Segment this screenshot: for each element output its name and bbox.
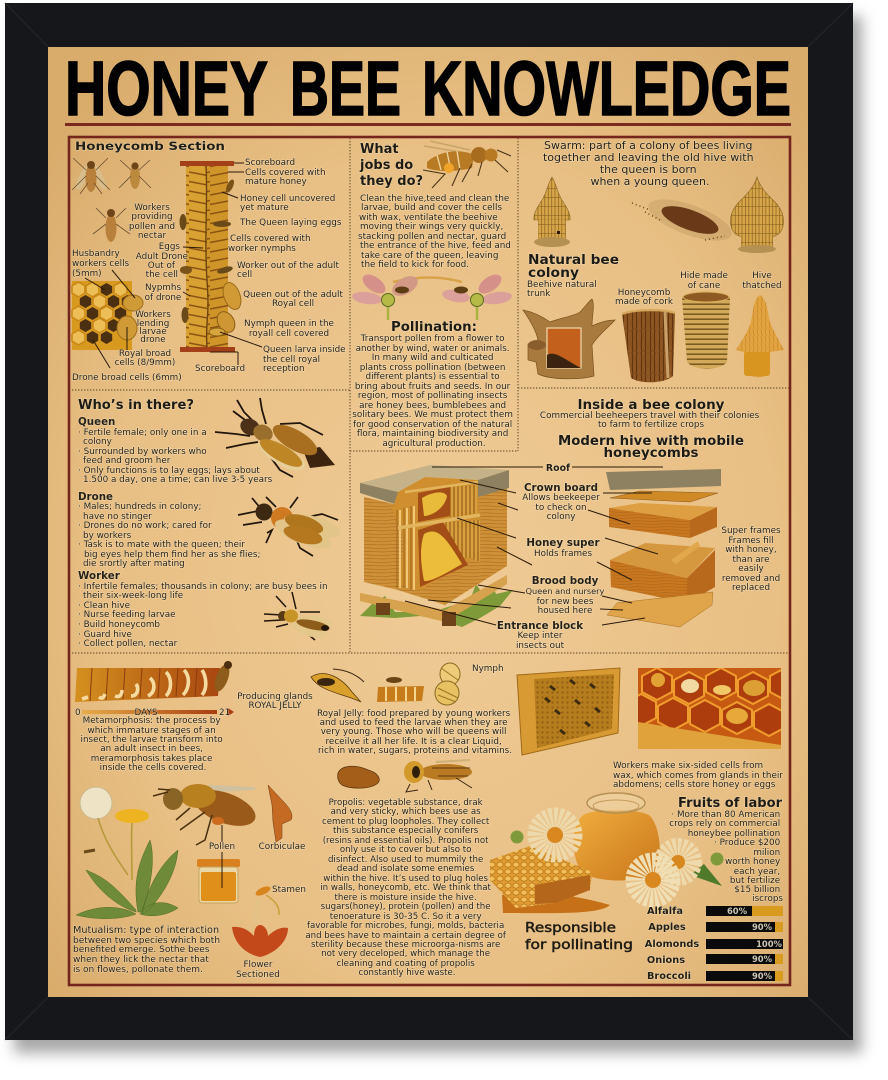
hive part labels: [497, 463, 781, 651]
illustration: worker bee: [264, 592, 334, 641]
illustration: large skep hive: [730, 177, 784, 253]
bar: almonds: Alomonds: [645, 939, 699, 950]
block: queen: feed and groom her: [83, 456, 171, 466]
panel: honeycomb section: [72, 139, 346, 383]
illustration: small skep hive: [534, 177, 570, 247]
text: pollination: flora, maintaining biodiversity and: [357, 429, 508, 439]
text: metamorphosis: Metamorphosis: the process by: [83, 716, 221, 726]
text: jobs: with wax, ventilate the beehive: [359, 213, 498, 223]
section labels: the cell: [146, 270, 178, 280]
text: fruits of labor: crops rely on commercial: [669, 819, 780, 829]
illustration: flying bee: [423, 141, 511, 188]
block: queen: colony: [83, 437, 112, 447]
text: pollination: for good conservation of the natural: [353, 420, 512, 430]
illustration: brood cells: [75, 661, 232, 702]
panel: six-sided cells: [517, 668, 800, 790]
block: queen: · Surrounded by workers who: [78, 447, 207, 457]
block: queen: · Only functions is to lay eggs; lays about: [78, 466, 260, 476]
hive part labels: Honey super: [526, 537, 601, 549]
section labels: Adult Drone: [136, 252, 188, 262]
text: pollination: are honey bees, bumblebees and: [359, 401, 506, 411]
heading: what jobs do they do: What: [360, 142, 399, 157]
illustration: cutaway hive: [360, 465, 513, 627]
hive type labels: Beehive natural: [527, 280, 597, 290]
panel: mutualism: [73, 783, 306, 980]
block: worker: · Clean hive: [78, 601, 130, 611]
label: nymph: Nymph: [472, 664, 504, 674]
hive part labels: than are: [732, 555, 770, 565]
text: metamorphosis: an adult insect in bees,: [100, 744, 203, 754]
text: swarm: when a young queen.: [590, 175, 710, 188]
text: pollination: different plants) is essential to: [366, 372, 500, 382]
text: jobs: take care of the queen, leaving: [361, 251, 498, 261]
text: propolis: this substance especially conifers: [333, 826, 479, 836]
days scale: 21: [219, 708, 230, 718]
block: drone: by workers: [83, 531, 132, 541]
block: queen: 1.500 a day, one a time; can live 3-5 years: [83, 475, 273, 485]
text: propolis: favorable for microbes, fungi, molds, bacteria: [307, 921, 504, 931]
block: worker: · Infertile females; thousands in colony; are busy bees in: [78, 582, 328, 592]
block: worker: · Nurse feeding larvae: [78, 610, 176, 620]
illustration: queen bee: [215, 398, 335, 477]
bar: almonds: 100%: [756, 939, 783, 949]
section labels: providing: [131, 212, 173, 222]
panel: what jobs do they do: [351, 141, 516, 449]
text: propolis: dead and isolate some enemies: [337, 864, 475, 874]
heading: what jobs do they do: they do?: [360, 174, 423, 189]
section labels: Queen larva inside: [263, 345, 346, 355]
text: metamorphosis: insect, the larvae transform into: [81, 735, 223, 745]
illustration: brood comb panel: [72, 281, 143, 350]
text: royal jelly: rich in water, sugars, proteins and vitamins.: [318, 746, 512, 756]
section labels: Royal broad: [119, 349, 171, 359]
text: pollination: bring about fruits and seeds. In our: [355, 382, 511, 392]
bar: broccoli: Broccoli: [647, 971, 691, 982]
text: pollination: another by wind, water or animals.: [356, 344, 510, 354]
label: producing glands: Producing glands: [237, 692, 313, 702]
bar: apples: [648, 922, 783, 933]
illustration: nymph: [435, 663, 460, 705]
heading: responsible for pollinating: Responsible: [525, 920, 616, 936]
section labels: pollen and: [129, 222, 175, 232]
section labels: cells (8/9mm): [115, 358, 175, 368]
text: jobs: stacking pollen and nectar, guard: [358, 232, 506, 242]
text: mutualism: [73, 925, 220, 975]
text: mutualism: is on flowes, pollonate them.: [73, 965, 203, 975]
block: drone: die srortly after mating: [83, 559, 185, 569]
grass: [360, 584, 513, 627]
title: BEE: [290, 46, 401, 132]
text: fruits of labor: honeybee pollination: [688, 829, 780, 839]
label: stamen: Stamen: [272, 885, 306, 895]
hive part labels: Holds frames: [534, 549, 592, 559]
bar: apples: Apples: [648, 922, 686, 933]
text: fruits of labor: each year,: [734, 867, 780, 877]
hive part labels: Queen and nursery: [526, 586, 605, 596]
section labels: Workers: [134, 203, 170, 213]
block: drone: · Drones do no work; cared for: [78, 521, 212, 531]
illustration: propolis lump: [338, 766, 379, 788]
text: six-sided cells: abdomens; cells store honey or eggs: [613, 780, 776, 790]
text: six-sided cells: Workers make six-sided cells from: [613, 761, 763, 771]
section labels: Out of: [148, 261, 176, 271]
hive type labels: of cane: [688, 281, 720, 291]
label: flower sectioned: Flower: [243, 960, 273, 970]
text: propolis: and bees have to maintain a certain degree of: [305, 931, 507, 941]
hive part labels: easily: [738, 564, 764, 574]
section labels: The Queen laying eggs: [239, 218, 342, 228]
text: pollination: plants cross pollination (between: [360, 363, 506, 373]
section labels: worker nymphs: [228, 244, 296, 254]
text: jobs: Clean the hive,teed and clean the: [360, 194, 509, 204]
section labels: yet mature: [240, 203, 289, 213]
text: royal jelly: Royal Jelly: food prepared by young workers: [317, 709, 511, 719]
section labels: mature honey: [245, 177, 307, 187]
text: fruits of labor: milion: [753, 848, 780, 858]
hive part labels: to check on: [535, 503, 587, 513]
block: worker: · Collect pollen, nectar: [78, 639, 178, 649]
hive part labels: removed and: [722, 574, 780, 584]
text: propolis: sterility because these microorga-nisms are: [311, 940, 500, 950]
text: propolis: sugars(honey), protein (pollen) and the: [321, 902, 491, 912]
text: metamorphosis: which immature stages of an: [88, 726, 216, 736]
panel: fruits of labor: [490, 793, 783, 982]
hive part labels: with honey,: [725, 545, 777, 555]
text: propolis: not very deceloped, which manage the: [321, 949, 490, 959]
text: pollination: solitary bees. We must protect them: [352, 410, 513, 420]
hive part labels: Allows beekeeper: [522, 493, 600, 503]
section labels: Eggs: [159, 242, 180, 252]
text: jobs: the field to kick for food.: [361, 260, 469, 270]
hive type labels: Honeycomb: [618, 288, 671, 298]
bar: almonds: [645, 939, 783, 950]
title underline: [65, 123, 791, 126]
block: worker: · Build honeycomb: [78, 620, 160, 630]
section labels: Cells covered with: [230, 234, 311, 244]
text: royal jelly: and used to feed the larvae when they are: [320, 718, 508, 728]
hive type labels: Hive: [752, 271, 772, 281]
text: royal jelly: receilve it all her life. It is a clear Liquid,: [325, 737, 502, 747]
section labels: Nypmhs: [145, 283, 181, 293]
text: pollination: In many wild and culticated: [372, 353, 493, 363]
text: fruits of labor: iscrops: [752, 894, 783, 904]
block: queen: · Fertile female; only one in a: [78, 428, 207, 438]
heading: inside a bee colony: Inside a bee colony: [578, 397, 725, 413]
hive type labels: thatched: [742, 281, 782, 291]
text: fruits of labor: · Produce $200: [714, 838, 781, 848]
hive part labels: Roof: [546, 463, 571, 474]
section labels: the cell royal: [263, 355, 320, 365]
block: drone: big eyes help them find her as she flies;: [84, 550, 260, 560]
hive type labels: [527, 271, 782, 307]
panel: royal jelly: [237, 663, 513, 756]
title: HONEY: [65, 46, 268, 132]
title: [65, 46, 791, 132]
illustration: thatched hive: [736, 295, 784, 377]
block: worker: their six-week-long life: [83, 591, 183, 601]
illustration: pollen jar: [197, 859, 240, 903]
heading: natural bee: Natural bee: [528, 252, 619, 268]
panel: inside a bee colony: [360, 397, 781, 651]
heading: honeycombs: honeycombs: [604, 445, 698, 461]
hive part labels: insects out: [516, 641, 565, 651]
bar: broccoli: [647, 971, 783, 982]
illustration: daisies and buds: [510, 818, 724, 897]
block: queen: [78, 416, 273, 485]
text: propolis: cement to plug loopholes. They collect: [322, 817, 490, 827]
heading: colony: colony: [528, 265, 579, 281]
illustration: bee: [404, 760, 472, 792]
text: propolis: tenoerature is 30-35 C. So it a very: [330, 912, 482, 922]
illustration: honey jar: [573, 793, 660, 880]
heading: modern hive: Modern hive with mobile: [558, 433, 744, 449]
text: fruits of labor: $15 billion: [734, 885, 780, 895]
illustration: pollination flowers: [351, 271, 513, 320]
block: drone: · Males; hundreds in colony;: [78, 502, 202, 512]
hive part labels: colony: [547, 512, 575, 522]
section labels: royall cell covered: [249, 329, 329, 339]
section labels: Workers: [135, 310, 171, 320]
hive part labels: replaced: [732, 583, 770, 593]
text: swarm: Swarm: part of a colony of bees living: [544, 139, 752, 152]
text: six-sided cells: wax, which comes from glands in their: [613, 771, 783, 781]
text: propolis: Propolis: vegetable substance, drak: [329, 798, 483, 808]
section labels: reception: [263, 364, 305, 374]
section labels: drone: [140, 335, 166, 345]
heading: for pollinating: for pollinating: [525, 937, 633, 953]
illustration: corbiculae: [268, 785, 292, 842]
bar: onions: Onions: [647, 955, 685, 966]
heading: who's in there: Who’s in there?: [78, 397, 194, 413]
section labels: larvae: [139, 327, 167, 337]
section labels: Nymph queen in the: [244, 319, 334, 329]
illustration: bee swarm: [632, 191, 736, 249]
heading: honeycomb section: Honeycomb Section: [75, 139, 225, 153]
illustration: gland: [311, 669, 364, 702]
label: corbiculae: Corbiculae: [259, 842, 305, 852]
hive type labels: made of cork: [615, 297, 674, 307]
illustration: stamen: [254, 884, 279, 922]
days scale: DAYS: [135, 708, 158, 718]
block: drone: have no stinger: [83, 512, 152, 522]
illustration: dandelion plant: [76, 787, 178, 919]
bar: alfalfa: Alfalfa: [647, 906, 683, 917]
hive type labels: trunk: [527, 289, 551, 299]
hive part labels: Super frames: [721, 526, 781, 536]
panel: metamorphosis: [75, 661, 234, 773]
bar: alfalfa: [647, 906, 783, 917]
illustration: honeycomb piece: [490, 846, 610, 913]
bar: broccoli: 90%: [752, 971, 773, 981]
panel: who's in there: [78, 397, 343, 649]
text: fruits of labor: worth honey: [725, 857, 780, 867]
hive leader lines: [405, 467, 663, 625]
hive part labels: Brood body: [532, 575, 599, 587]
text: metamorphosis: inside the cells covered.: [100, 763, 206, 773]
section labels: Worker out of the adult: [237, 261, 339, 271]
days scale: 0: [75, 708, 81, 718]
bar: apples: 90%: [752, 922, 773, 932]
text: pollination: Transport pollen from a flower to: [360, 334, 505, 344]
block: drone: · Task is to mate with the queen; their: [78, 540, 245, 550]
bar: alfalfa: 60%: [727, 906, 748, 916]
pollen pointer: [221, 825, 223, 888]
section labels: Cells covered with: [245, 168, 326, 178]
panel: swarm: [523, 139, 784, 382]
hive part labels: Crown board: [524, 482, 598, 494]
text: swarm: the queen is born: [600, 163, 697, 176]
text: propolis: disinfect. Also used to mummily the: [328, 855, 483, 865]
illustration: honeycomb closeup: [638, 668, 781, 749]
text: pollination: region, most of pollinating insects: [358, 391, 508, 401]
section labels: Scoreboard: [195, 364, 245, 374]
text: propolis: constantly hive waste.: [358, 968, 456, 978]
text: pollination: agricultural production.: [382, 439, 486, 449]
text: propolis: (resins and essential oils). Propolis not: [323, 836, 489, 846]
illustration: comb column: [180, 161, 244, 352]
section labels: Husbandry: [72, 249, 120, 259]
bar: onions: 90%: [752, 954, 773, 964]
text: propolis: only use it to cover but also to: [340, 845, 471, 855]
illustration: natural trunk hive: [523, 299, 615, 379]
text: fruits of labor: but fertilize: [730, 876, 780, 886]
text: fruits of labor: · More than 80 American: [671, 810, 780, 820]
hive part labels: for new bees: [537, 597, 594, 607]
panel: propolis: [305, 760, 509, 978]
heading: fruits of labor: Fruits of labor: [678, 795, 782, 811]
text: propolis: in walls, honeycomb, etc. We think that: [320, 883, 492, 893]
illustration: bee frame: [517, 668, 620, 755]
illustration: cane hive: [682, 292, 730, 369]
text: propolis: cleaning and coating of propolis: [337, 959, 475, 969]
text: commercial beekeepers: to farm to fertilize crops: [598, 420, 704, 430]
label: flower sectioned: Sectioned: [236, 970, 280, 980]
days scale: [75, 708, 234, 718]
section labels: Honey cell uncovered: [240, 194, 335, 204]
label: producing glands: ROYAL JELLY: [248, 701, 302, 711]
bar chart: crops pollinated: [645, 906, 783, 982]
section labels: Queen out of the adult: [243, 290, 343, 300]
illustration: small comb cells: [377, 677, 424, 702]
block: queen: Queen: [78, 416, 115, 428]
section labels: nectar: [138, 231, 167, 241]
text: royal jelly: very young. Those who will be queens will: [321, 727, 507, 737]
block: worker: [78, 570, 328, 649]
inner content border: [69, 137, 790, 985]
block: worker: Worker: [78, 570, 121, 582]
bar: onions: [647, 954, 783, 966]
text: jobs: moving their wings very quickly,: [360, 222, 503, 232]
text: mutualism: when they lick the nectar that: [73, 955, 209, 965]
text: propolis: and very sticky, which bees use as: [331, 807, 481, 817]
hive part labels: Frames fill: [728, 536, 774, 546]
section labels: workers cells: [72, 259, 130, 269]
hive part labels: Entrance block: [497, 620, 584, 632]
text: propolis: within the hive. It’s used to plug holes: [323, 874, 489, 884]
poster paper background: [48, 47, 808, 997]
hive part labels: Keep inter: [517, 631, 563, 641]
section labels: [72, 158, 346, 383]
text: propolis: there is moisture inside the hive.: [335, 893, 477, 903]
block: drone: Drone: [78, 491, 113, 503]
hive type labels: Hide made: [680, 271, 728, 281]
text: mutualism: Mutualism: type of interaction: [73, 925, 219, 936]
text: mutualism: between two species which both: [73, 936, 220, 946]
block: worker: · Guard hive: [78, 630, 132, 640]
text: mutualism: benefited emerge. Sothe bees: [73, 945, 210, 955]
illustration: sectioned flower: [232, 925, 288, 957]
illustration: three worker bees: [72, 158, 151, 242]
leader lines: [85, 163, 262, 368]
text: commercial beekeepers: Commercial beeheepers travel with their colonies: [540, 411, 760, 421]
hive part labels: housed here: [538, 606, 592, 616]
illustration: drone bee: [238, 497, 343, 556]
section labels: lending: [137, 319, 169, 329]
section labels: of drone: [145, 293, 181, 303]
illustration: cork hive: [622, 310, 675, 382]
label: pollen: Pollen: [209, 842, 235, 852]
text: jobs: the entrance of the hive, feed and: [360, 241, 511, 251]
heading: pollination: Pollination:: [391, 319, 477, 335]
panel dividers: [69, 138, 789, 653]
section labels: Scoreboard: [245, 158, 295, 168]
section labels: Royal cell: [272, 299, 314, 309]
section labels: (5mm): [72, 269, 102, 279]
section labels: Drone broad cells (6mm): [72, 373, 182, 383]
heading: what jobs do they do: jobs do: [359, 158, 413, 173]
text: metamorphosis: meramorphosis takes place: [91, 754, 212, 764]
block: drone: [78, 491, 260, 569]
illustration: big foraging bee: [153, 783, 260, 845]
text: jobs: larvae, build and cover the cells: [361, 203, 502, 213]
section labels: cell: [237, 270, 252, 280]
text: swarm: together and leaving the old hive with: [543, 151, 754, 164]
illustration: exploded hive: [606, 469, 721, 627]
